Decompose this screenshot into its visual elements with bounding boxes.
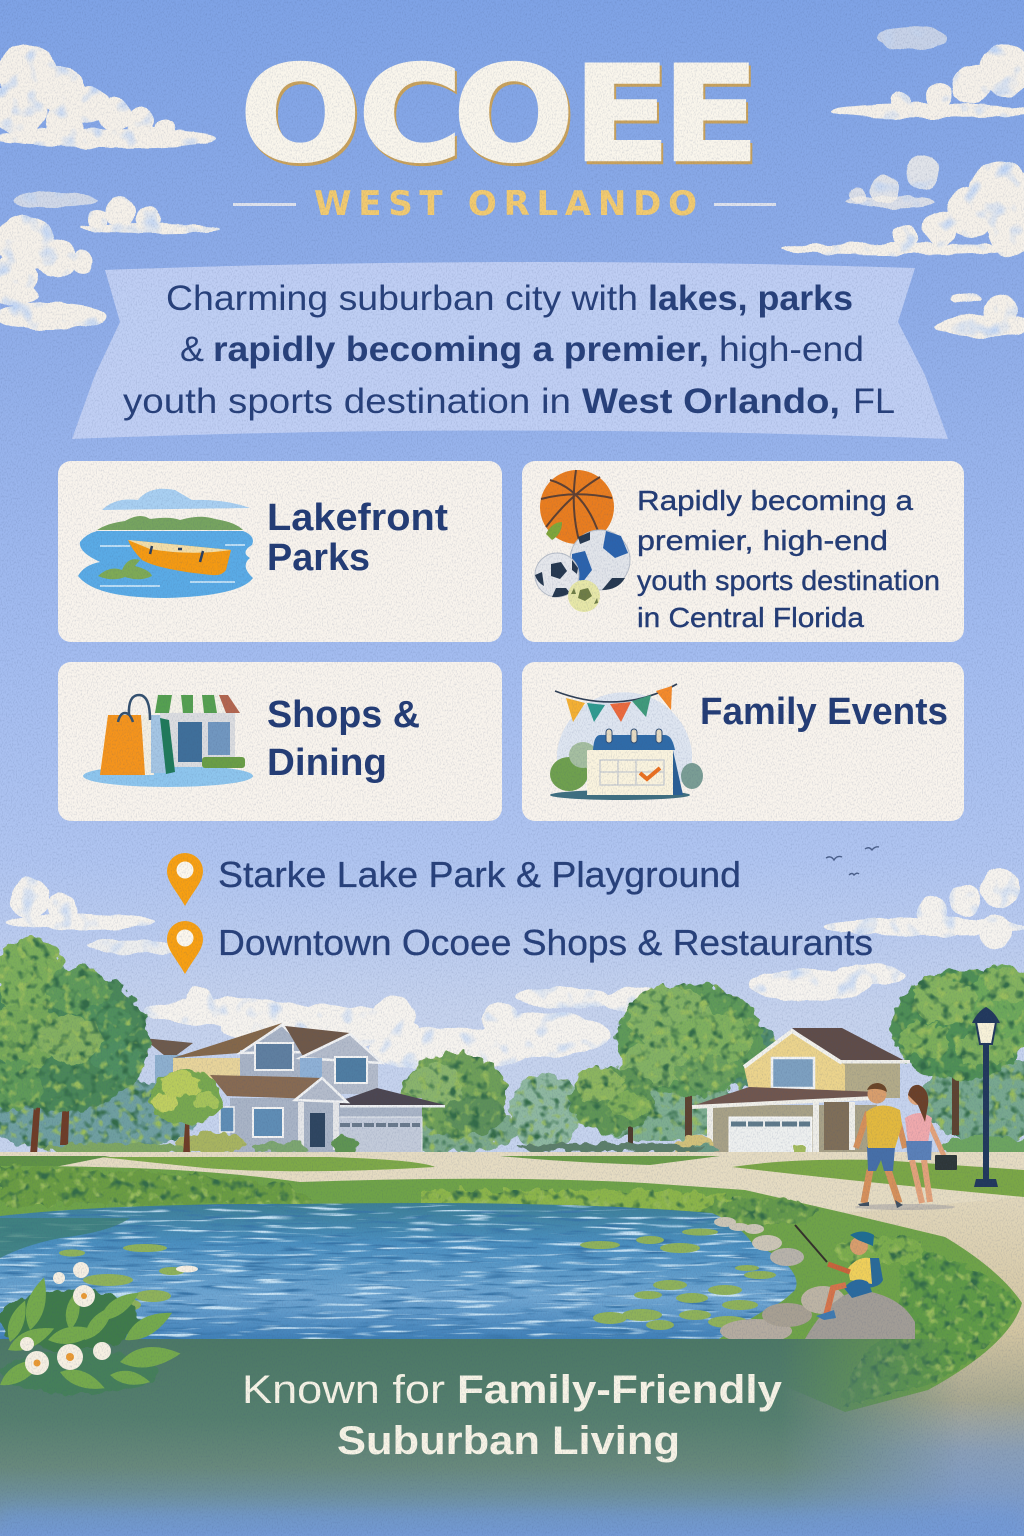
label: Downtown: Downtown Ocoee Shops & Restaurants — [218, 922, 873, 963]
flowers foreground — [0, 1262, 198, 1395]
description text: Charming suburban city with — [166, 279, 638, 318]
subtitle: West Orlando: WEST ORLANDO — [314, 184, 697, 224]
title: OCOEE: OCOEE — [242, 41, 761, 195]
lamp post — [972, 1007, 1000, 1187]
boy fishing — [795, 1225, 883, 1320]
icon: shopping bags and storefront — [83, 695, 253, 787]
panel: bottom banner — [0, 1262, 1024, 1536]
tree: behind right house — [570, 984, 764, 1145]
icon: calendar and bunting — [550, 684, 703, 800]
label: Shops & — [267, 694, 420, 736]
tree: right — [892, 965, 1024, 1135]
label: Rapidly becoming a — [637, 485, 913, 516]
scene: neighbourhood — [0, 937, 1024, 1536]
icon: pin — [167, 921, 203, 974]
label: in Central Florida — [637, 602, 864, 633]
left house — [143, 1023, 445, 1153]
right house — [692, 1028, 910, 1157]
closing statement — [242, 1368, 783, 1463]
people walking — [855, 1083, 957, 1210]
clouds: upper left — [0, 44, 220, 330]
shrubs at left house — [45, 1132, 359, 1157]
description text: high-end — [719, 330, 864, 369]
shore stones — [714, 1217, 804, 1266]
label: Lakefront — [267, 497, 448, 539]
panel: lakefront parks: Parks — [267, 537, 370, 579]
description text — [123, 279, 895, 421]
panel: family events — [522, 662, 964, 821]
road to bottom right — [600, 1197, 1024, 1536]
birds — [826, 847, 879, 875]
clouds: upper right — [780, 26, 1024, 337]
ribbon banner with description — [72, 262, 948, 439]
clouds: lower sky — [5, 868, 1024, 1072]
icon: sports balls — [535, 470, 630, 612]
panel: lakefront parks — [58, 461, 502, 642]
closing statement: Family-Friendly — [457, 1368, 783, 1412]
lily pads — [59, 1228, 776, 1330]
label: premier, high-end — [637, 525, 888, 556]
icon: kayak on lake — [78, 489, 253, 598]
background trees — [0, 1023, 1024, 1153]
description text: FL — [853, 382, 895, 421]
pond teal reflection — [0, 1218, 130, 1258]
label: Family Events — [700, 691, 948, 733]
closing statement: Known for — [242, 1368, 445, 1412]
title: OCOEE: OCOEE — [240, 38, 759, 192]
description text: youth sports destination in — [123, 382, 571, 421]
lawn and path — [0, 1152, 1024, 1222]
description text: rapidly becoming a premier, — [213, 330, 709, 369]
label: Starke Lake: Starke Lake Park & Playground — [218, 854, 741, 895]
panel: shops and dining: Dining — [267, 742, 387, 784]
label: youth sports destination — [637, 565, 940, 596]
panel: shops and dining — [58, 662, 502, 821]
icon: pin — [167, 853, 203, 906]
description text: West Orlando, — [582, 382, 840, 421]
pond — [0, 1203, 797, 1339]
description text: lakes, parks — [648, 279, 853, 318]
label — [637, 485, 940, 633]
tree: small yellow-green — [150, 1071, 222, 1155]
shrubs at right house — [515, 1136, 1024, 1160]
panel: youth sports — [522, 461, 964, 642]
closing statement: Suburban Living — [337, 1419, 680, 1463]
location pins — [167, 853, 873, 974]
grass bank — [0, 1166, 1022, 1412]
description text: & — [180, 330, 204, 369]
tree: large left — [0, 937, 150, 1155]
rocks — [720, 1286, 915, 1343]
